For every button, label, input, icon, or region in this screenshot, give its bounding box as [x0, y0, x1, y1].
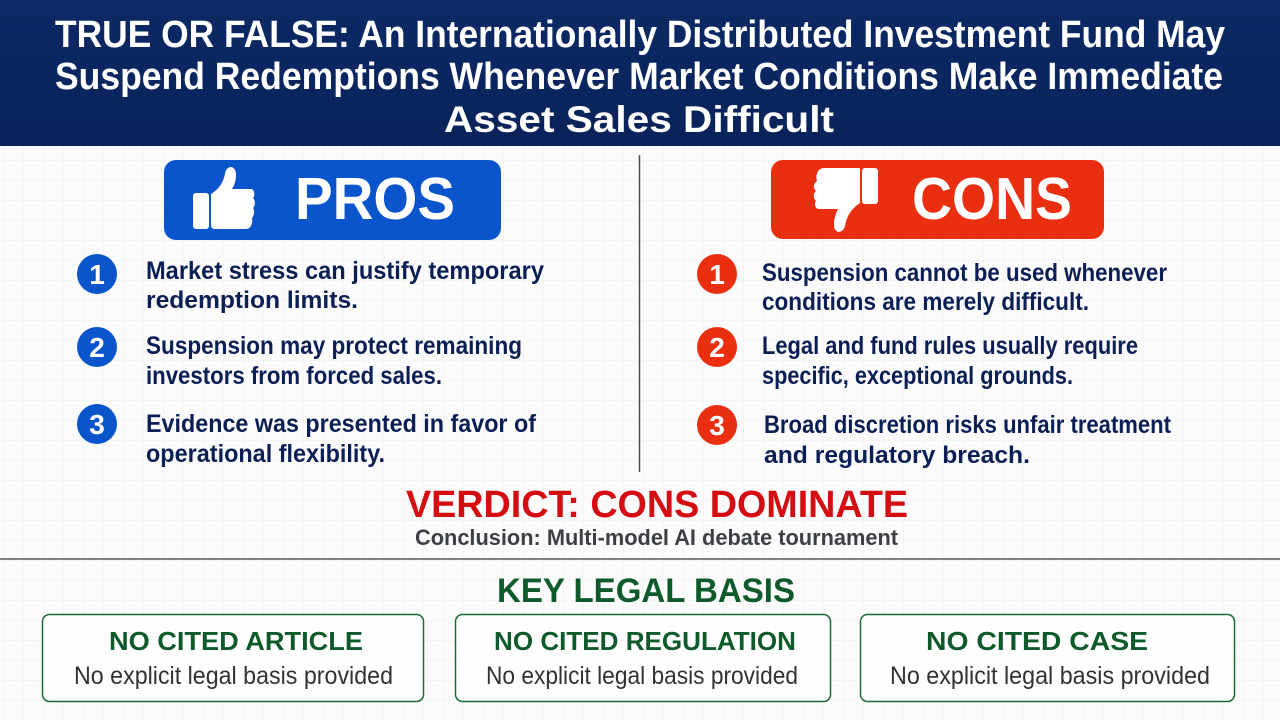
- legal card: case: No explicit legal basis provided: [890, 662, 1210, 690]
- pros heading badge: [164, 160, 501, 240]
- cons item 1: conditions are merely difficult.: [762, 288, 1089, 316]
- title banner: TRUE OR FALSE: An Internationally Distributed Investment Fund May: [55, 14, 1225, 56]
- pros item 2: investors from forced sales.: [146, 362, 442, 390]
- pros heading badge: PROS: [295, 166, 455, 232]
- pros item 1: [77, 254, 544, 314]
- pros item 3: Evidence was presented in favor of: [146, 410, 537, 438]
- pros item 1: Market stress can justify temporary: [146, 257, 544, 285]
- legal card: article: [42, 614, 424, 702]
- cons item 2: specific, exceptional grounds.: [762, 362, 1073, 390]
- cons item 3: 3: [709, 410, 725, 441]
- cons item 1: [697, 254, 1167, 316]
- panel: cons: [697, 160, 1172, 469]
- title banner: Suspend Redemptions Whenever Market Conditions Make Immediate: [55, 56, 1223, 98]
- legal card: regulation: No explicit legal basis provided: [486, 662, 798, 690]
- legal card: case: NO CITED CASE: [926, 626, 1148, 656]
- cons item 1: Suspension cannot be used whenever: [762, 259, 1167, 287]
- cons item 1: 1: [709, 259, 725, 290]
- legal card: article: No explicit legal basis provided: [74, 662, 393, 690]
- title banner: [0, 0, 1280, 146]
- legal card: case: [860, 614, 1234, 702]
- icon: thumbs down: [814, 168, 878, 232]
- pros item 2: Suspension may protect remaining: [146, 332, 522, 360]
- pros item 2: 2: [89, 332, 105, 363]
- pros item 2: [77, 327, 522, 390]
- cons item 2: 2: [709, 332, 725, 363]
- verdict: VERDICT: CONS DOMINATE: [406, 484, 908, 526]
- pros item 3: 3: [89, 409, 105, 440]
- icon: thumbs up: [193, 167, 255, 229]
- title banner: Asset Sales Difficult: [444, 99, 834, 140]
- cons heading badge: [771, 160, 1104, 239]
- cons item 2: [697, 327, 1138, 390]
- cons item 3: [697, 405, 1172, 469]
- pros item 3: operational flexibility.: [146, 440, 385, 468]
- pros item 3: [77, 404, 537, 468]
- legal card: article: NO CITED ARTICLE: [109, 626, 363, 656]
- cons heading badge: CONS: [912, 166, 1072, 232]
- pros item 1: redemption limits.: [146, 287, 358, 314]
- cons item 3: and regulatory breach.: [764, 442, 1030, 469]
- cons item 3: Broad discretion risks unfair treatment: [764, 411, 1172, 439]
- legal card: regulation: NO CITED REGULATION: [494, 626, 796, 656]
- pros item 1: 1: [89, 259, 105, 290]
- legal card: regulation: [456, 614, 830, 702]
- cons item 2: Legal and fund rules usually require: [762, 332, 1138, 360]
- legal basis heading: KEY LEGAL BASIS: [497, 572, 795, 610]
- conclusion note: Conclusion: Multi-model AI debate tournament: [415, 525, 899, 550]
- panel: pros: [77, 160, 544, 468]
